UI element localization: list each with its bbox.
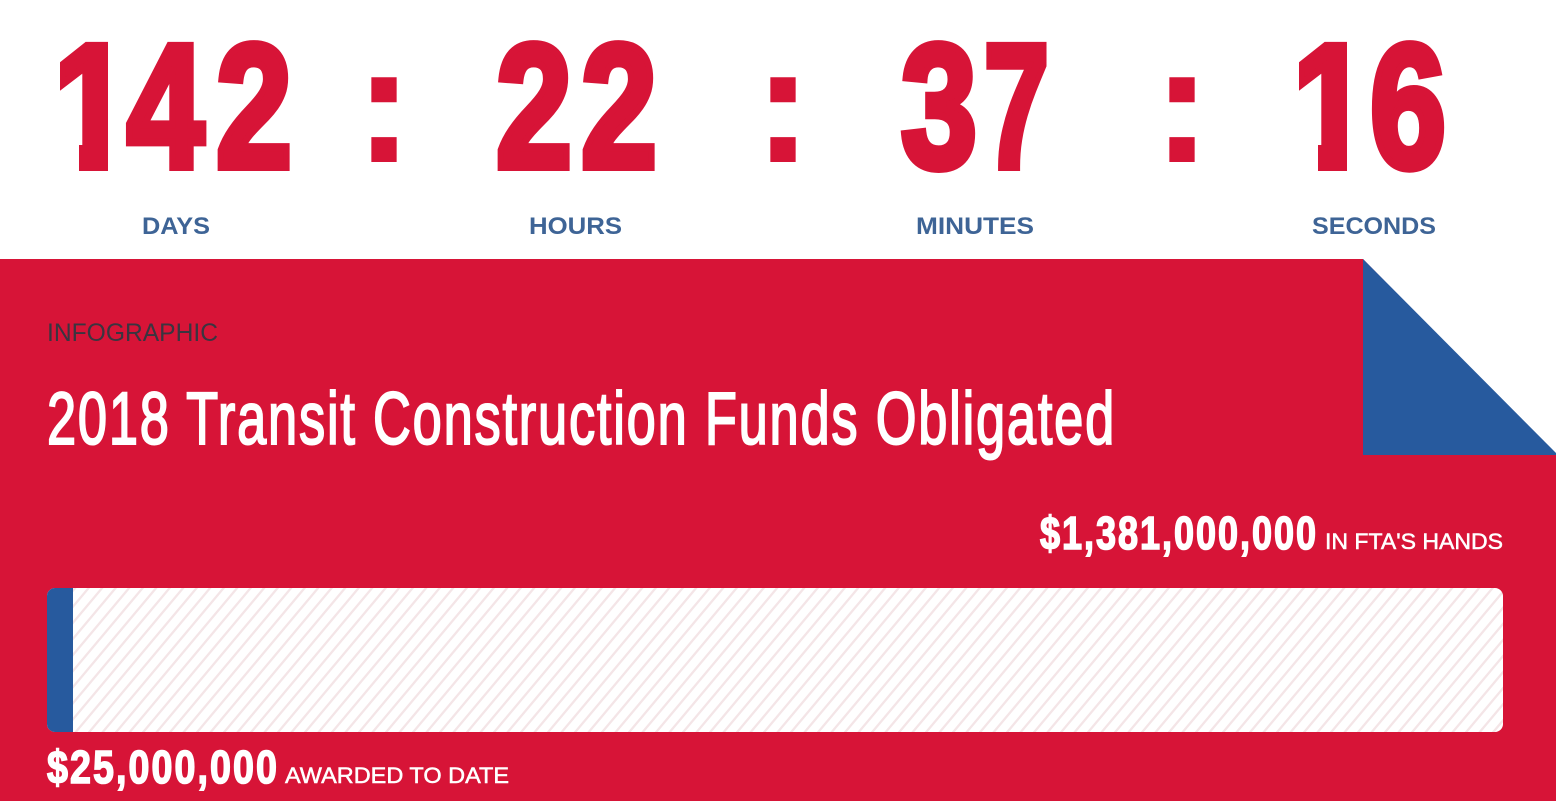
total amount callout: IN FTA'S HANDS <box>1325 529 1503 554</box>
awarded amount callout <box>47 741 509 793</box>
colon: : <box>357 13 411 196</box>
awarded amount callout: $25,000,000 <box>47 741 279 793</box>
colon: : <box>1155 13 1209 196</box>
panel: transit funds <box>0 259 1556 801</box>
folded corner cutout <box>1363 259 1556 455</box>
panel background <box>0 259 1556 801</box>
minutes number: 3 <box>901 9 977 205</box>
hours number <box>496 9 657 205</box>
minutes number <box>901 9 1049 205</box>
days label: DAYS <box>142 213 210 240</box>
minutes label: MINUTES <box>916 213 1034 240</box>
folded corner <box>1363 259 1556 455</box>
colon: : <box>756 13 810 196</box>
hours number: 2 <box>496 9 572 205</box>
days number: 2 <box>216 9 292 205</box>
days number <box>60 40 290 171</box>
progress bar <box>47 588 1503 732</box>
hours label: HOURS <box>529 213 622 240</box>
seconds number <box>1299 40 1444 173</box>
awarded amount callout: AWARDED TO DATE <box>285 763 509 788</box>
days number: 1 <box>52 9 132 205</box>
days number: 4 <box>127 9 204 205</box>
title: 2018 Transit Construction Funds Obligated <box>47 377 1116 460</box>
countdown <box>60 40 1444 234</box>
seconds label: SECONDS <box>1312 213 1436 240</box>
bar fill <box>47 588 73 732</box>
total amount callout: $1,381,000,000 <box>1040 507 1318 559</box>
minutes number: 7 <box>984 9 1049 205</box>
bar track <box>47 588 1503 732</box>
seconds number: 6 <box>1370 9 1446 205</box>
eyebrow label: INFOGRAPHIC <box>47 319 218 347</box>
seconds number: 1 <box>1291 9 1371 205</box>
hours number: 2 <box>581 9 657 205</box>
